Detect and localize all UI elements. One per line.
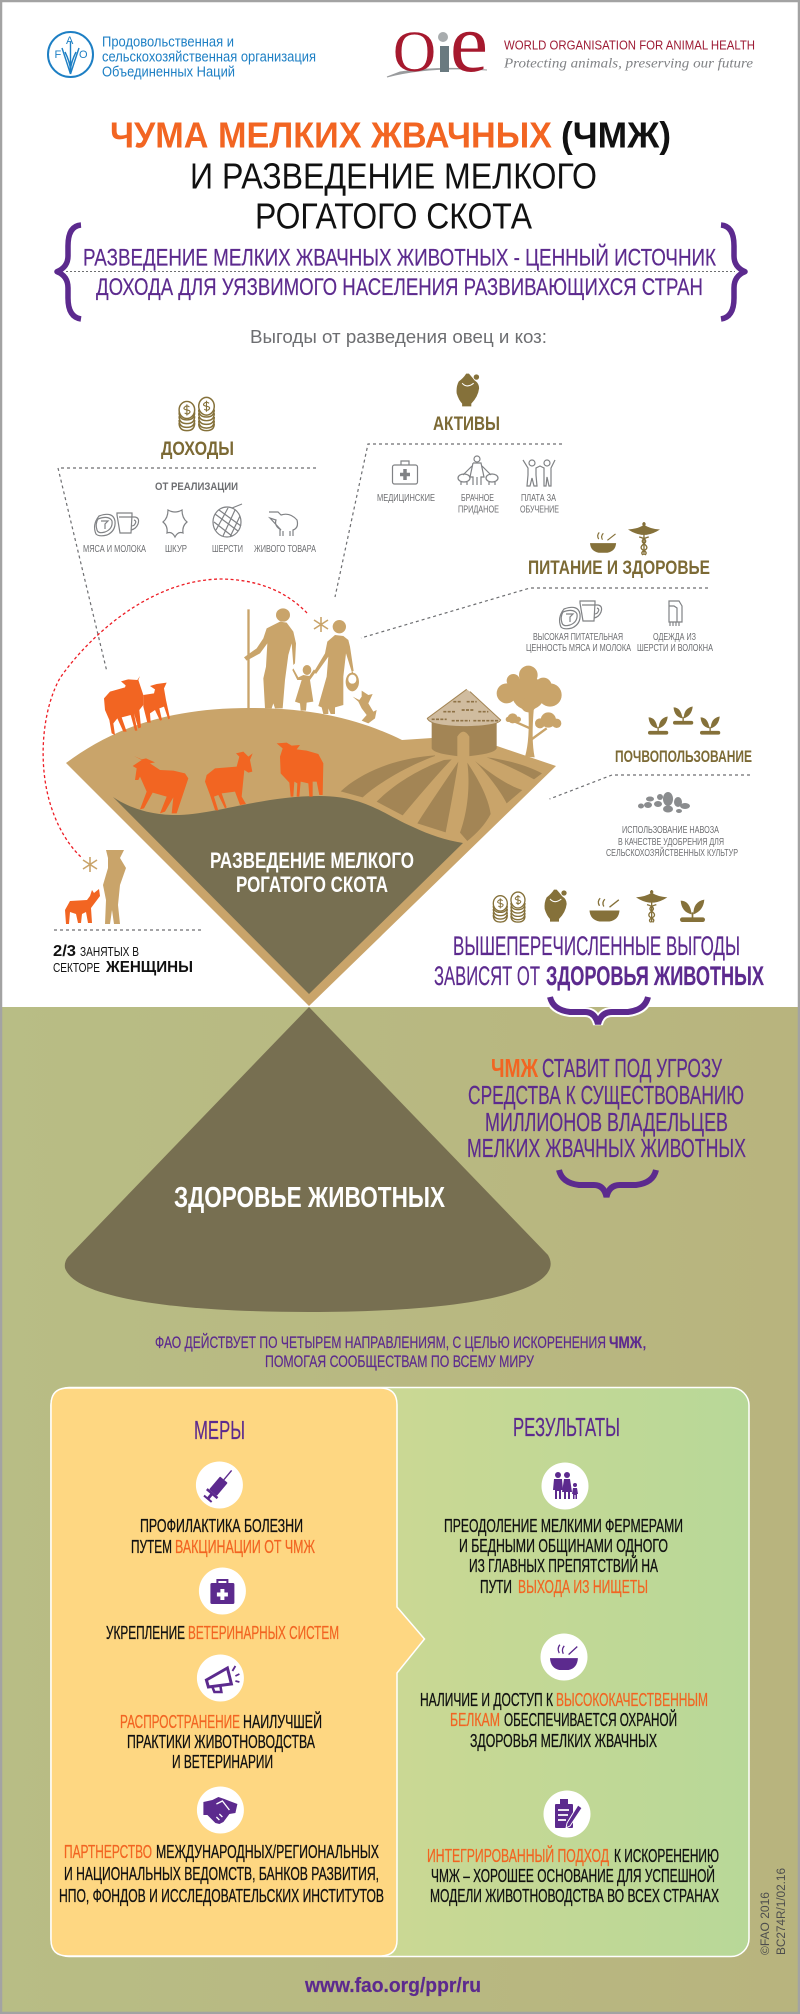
sheep pair — [104, 676, 170, 735]
text: high quality protein: БЕЛКАМ — [450, 1710, 500, 1730]
panel: women in the sector: 2/3 — [53, 943, 76, 960]
panel: measures background — [51, 1388, 424, 1956]
panel: assets: БРАЧНОЕ — [461, 492, 494, 504]
panel: nutrition and health: ПИТАНИЕ И ЗДОРОВЬЕ — [528, 557, 710, 579]
panel: income — [58, 397, 316, 672]
panel: income: ШКУР — [165, 543, 187, 555]
panel: nutrition and health: ВЫСОКАЯ ПИТАТЕЛЬНАЯ — [533, 631, 623, 643]
panel: income: ШЕРСТИ — [212, 543, 243, 555]
icon: syringe — [196, 1462, 243, 1508]
central label — [210, 848, 414, 897]
text: out of poverty: И БЕДНЫМИ ОБЩИНАМИ ОДНОГО — [459, 1536, 668, 1556]
FAO name: сельскохозяйственная организация — [102, 48, 316, 66]
copyright: ©FAO 2016 — [760, 1892, 772, 1955]
brace: right — [721, 225, 745, 319]
panel: land use: СЕЛЬСКОХОЗЯЙСТВЕННЫХ КУЛЬТУР — [606, 846, 738, 859]
central label: РАЗВЕДЕНИЕ МЕЛКОГО — [210, 848, 414, 873]
OIE name — [503, 38, 755, 70]
OIE name: Protecting animals, preserving our future — [503, 56, 753, 70]
panel: nutrition and health: ОДЕЖДА ИЗ — [653, 631, 696, 643]
website: www.fao.org/ppr/ru — [304, 1975, 481, 1997]
icon: bowl — [540, 1634, 588, 1680]
title: РОГАТОГО СКОТА — [255, 196, 532, 236]
text: out of poverty: ИЗ ГЛАВНЫХ ПРЕПЯТСТВИЙ НА — [469, 1555, 658, 1576]
panel: assets: ПЛАТА ЗА — [521, 492, 556, 504]
text: veterinary systems — [106, 1623, 339, 1643]
callout: benefits depend on animal health: ЗАВИСЯТ ОТ — [434, 961, 540, 991]
text: disease prevention: ПРОФИЛАКТИКА БОЛЕЗНИ — [140, 1516, 303, 1536]
panel: assets: ОБУЧЕНИЕ — [520, 504, 559, 516]
FAO name: Объединенных Наций — [102, 64, 235, 80]
panel: women in the sector: СЕКТОРЕ — [53, 960, 100, 975]
central label: РОГАТОГО СКОТА — [236, 872, 388, 897]
field furrows — [341, 755, 542, 841]
FAO logo — [48, 32, 93, 77]
panel: assets: АКТИВЫ — [433, 413, 500, 435]
text: out of poverty: ВЫХОДА ИЗ НИЩЕТЫ — [518, 1577, 648, 1597]
icon: family — [542, 1462, 588, 1510]
panel: land use: ИСПОЛЬЗОВАНИЕ НАВОЗА — [622, 824, 719, 836]
icon: goat — [65, 889, 100, 924]
FAO logo: O — [79, 49, 88, 61]
icon: jug — [457, 374, 479, 406]
brace: down with halo — [550, 997, 648, 1024]
icon: manure — [638, 792, 690, 813]
panel: nutrition and health: ЦЕННОСТЬ МЯСА И МОЛОКА — [526, 642, 631, 654]
brace: left — [57, 225, 81, 319]
callout: threat: ЧМЖ — [491, 1053, 538, 1083]
icon: handshake — [197, 1786, 244, 1834]
panel: women in the sector: ЖЕНЩИНЫ — [105, 959, 193, 976]
icon: hide — [163, 510, 187, 537]
FAO action text — [155, 1333, 647, 1371]
FAO logo: A — [66, 35, 74, 47]
text: best practice: РАСПРОСТРАНЕНИЕ — [120, 1712, 240, 1732]
tree — [497, 666, 562, 757]
text: best practice — [120, 1711, 322, 1772]
farmland and hut — [341, 666, 562, 841]
icon: clipboard — [544, 1790, 590, 1838]
heading: measures: МЕРЫ — [194, 1415, 245, 1445]
panel: women in the sector: ЗАНЯТЫХ В — [80, 944, 139, 959]
family and animals — [104, 608, 377, 813]
icon: caduceus — [628, 522, 660, 555]
panel: nutrition and health — [361, 522, 713, 654]
title: (ЧМЖ) — [561, 114, 671, 156]
text: veterinary systems: ВЕТЕРИНАРНЫХ СИСТЕМ — [188, 1623, 339, 1643]
text: out of poverty — [444, 1516, 683, 1597]
text: high quality protein — [420, 1690, 708, 1751]
text: high quality protein: ОБЕСПЕЧИВАЕТСЯ ОХРАНОЙ — [504, 1709, 677, 1730]
brace: down — [559, 1170, 656, 1197]
title: И РАЗВЕДЕНИЕ МЕЛКОГО — [190, 156, 597, 196]
text: partnership: И НАЦИОНАЛЬНЫХ ВЕДОМСТВ, БАНКОВ РАЗВИТИЯ, — [64, 1864, 379, 1884]
panel: income: ДОХОДЫ — [161, 438, 234, 460]
text: disease prevention — [131, 1516, 315, 1557]
icon: scarf — [669, 601, 682, 626]
text: partnership — [59, 1842, 384, 1906]
callout: benefits depend on animal health — [434, 931, 764, 991]
panel: land use: В КАЧЕСТВЕ УДОБРЕНИЯ ДЛЯ — [618, 836, 724, 848]
panel: assets — [335, 374, 562, 597]
OIE logo — [387, 0, 488, 90]
icon: coins — [179, 397, 214, 431]
text: integrated approach — [427, 1845, 719, 1906]
icon: medical kit — [392, 461, 418, 484]
text: veterinary systems: УКРЕПЛЕНИЕ — [106, 1623, 185, 1643]
panel: land use — [550, 707, 752, 859]
icon: bowl — [590, 532, 616, 553]
panel: income: МЯСА И МОЛОКА — [83, 543, 146, 555]
icon: bride price — [458, 456, 498, 485]
land: tan funnel — [66, 708, 556, 1006]
icon: sheep — [269, 512, 298, 536]
FAO name — [102, 34, 316, 80]
panel: assets: ПРИДАНОЕ — [458, 504, 499, 516]
text: best practice: И ВЕТЕРИНАРИИ — [172, 1752, 273, 1772]
FAO action text: ФАО ДЕЙСТВУЕТ ПО ЧЕТЫРЕМ НАПРАВЛЕНИЯМ, С ЦЕЛЬЮ ИСКОРЕНЕНИЯ — [155, 1333, 606, 1352]
icons: plants — [648, 707, 720, 735]
FAO action text: , — [642, 1333, 647, 1352]
panel: assets: МЕДИЦИНСКИЕ — [377, 492, 435, 504]
FAO action text: ЧМЖ — [609, 1333, 642, 1352]
FAO name: Продовольственная и — [102, 34, 234, 50]
panel: measures and results — [51, 1388, 749, 1956]
copyright — [760, 1868, 788, 1955]
callout: threat — [467, 1053, 746, 1163]
icon: medical kit — [199, 1568, 246, 1614]
icon: meat and milk — [560, 601, 602, 629]
icon: wool yarn — [213, 504, 242, 537]
text: partnership: ПАРТНЕРСТВО — [64, 1842, 152, 1862]
arc: women link — [43, 579, 307, 857]
icon row: all benefits — [493, 890, 705, 922]
icon: asterisk top — [314, 617, 328, 632]
title — [110, 114, 671, 236]
icon: meat and milk — [95, 513, 139, 536]
text: high quality protein: ЗДОРОВЬЯ МЕЛКИХ ЖВАЧНЫХ — [470, 1731, 657, 1751]
text: partnership: МЕЖДУНАРОДНЫХ/РЕГИОНАЛЬНЫХ — [156, 1842, 379, 1862]
text: disease prevention: ВАКЦИНАЦИИ ОТ ЧМЖ — [175, 1537, 315, 1557]
icon: woman — [103, 850, 126, 924]
text: integrated approach: ИНТЕГРИРОВАННЫЙ ПОДХОД — [427, 1845, 609, 1866]
text: best practice: ПРАКТИКИ ЖИВОТНОВОДСТВА — [127, 1732, 315, 1752]
panel: nutrition and health: ШЕРСТИ И ВОЛОКНА — [637, 642, 713, 654]
icon: megaphone — [197, 1654, 244, 1702]
text: best practice: НАИЛУЧШЕЙ — [243, 1711, 322, 1732]
panel: women in the sector — [53, 850, 204, 976]
icon: children education — [523, 460, 555, 486]
land: dark olive funnel — [113, 796, 463, 994]
heading: results: РЕЗУЛЬТАТЫ — [513, 1412, 620, 1442]
farming family — [244, 608, 377, 723]
text: integrated approach: К ИСКОРЕНЕНИЮ — [614, 1846, 719, 1866]
text: high quality protein: ВЫСОКОКАЧЕСТВЕННЫМ — [556, 1690, 708, 1710]
panel: income: ЖИВОГО ТОВАРА — [254, 543, 316, 555]
OIE logo: O — [393, 19, 436, 84]
hut — [427, 689, 501, 760]
FAO action text: ПОМОГАЯ СООБЩЕСТВАМ ПО ВСЕМУ МИРУ — [265, 1352, 534, 1371]
panel: income: ОТ РЕАЛИЗАЦИИ — [155, 481, 238, 493]
olive lower background — [0, 1007, 800, 2014]
copyright: BC274R/1/02.16 — [776, 1868, 788, 1955]
FAO logo: F — [54, 49, 62, 61]
text: disease prevention: ПУТЕМ — [131, 1537, 172, 1557]
title: ЧУМА МЕЛКИХ ЖВАЧНЫХ — [110, 114, 552, 156]
cone label: ЗДОРОВЬЕ ЖИВОТНЫХ — [174, 1182, 446, 1214]
animal health cone — [65, 1007, 551, 1312]
benefits heading: Выгоды от разведения овец и коз: — [250, 327, 547, 347]
text: out of poverty: ПРЕОДОЛЕНИЕ МЕЛКИМИ ФЕРМЕРАМИ — [444, 1516, 683, 1536]
text: partnership: НПО, ФОНДОВ И ИССЛЕДОВАТЕЛЬСКИХ ИНСТИТУТОВ — [59, 1886, 384, 1906]
OIE name: WORLD ORGANISATION FOR ANIMAL HEALTH — [504, 38, 755, 52]
icon: asterisk bottom — [83, 857, 97, 872]
goats and sheep — [133, 743, 323, 813]
subtitle — [66, 244, 735, 301]
text: out of poverty: ПУТИ — [480, 1577, 512, 1597]
text: high quality protein: НАЛИЧИЕ И ДОСТУП К — [420, 1690, 553, 1710]
